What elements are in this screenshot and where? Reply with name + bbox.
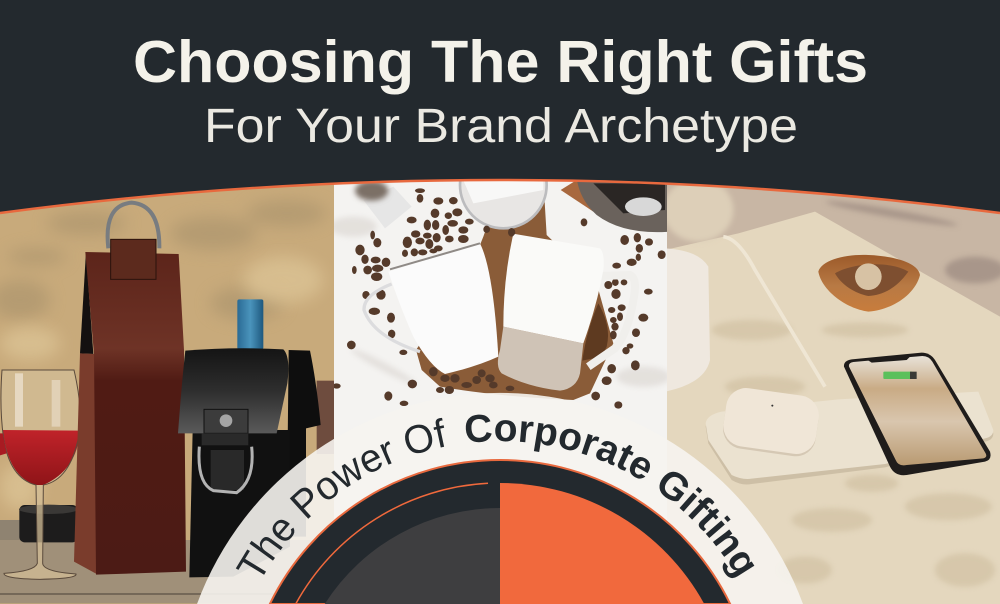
circular badge	[197, 388, 840, 604]
table top	[0, 540, 208, 604]
black leather carrier	[178, 348, 321, 577]
badge heading on arc: Corporate Gifting	[466, 414, 754, 578]
white vase	[665, 248, 710, 392]
panel: leather wine carriers photo	[0, 170, 340, 604]
coffee beans	[333, 188, 666, 409]
glass lid	[458, 181, 548, 230]
ring handle	[108, 203, 159, 248]
marble shading	[330, 217, 670, 387]
black box	[19, 505, 78, 542]
brown leather carrier	[74, 239, 186, 575]
smartphone	[844, 353, 991, 475]
badge dark ring	[270, 460, 730, 604]
earbuds case	[723, 388, 816, 456]
panel: wireless charger photo	[663, 170, 1000, 604]
charging cable	[723, 237, 825, 387]
wood board	[416, 180, 613, 400]
badge heading on arc	[236, 414, 754, 578]
background cloth	[667, 185, 1000, 316]
header banner	[0, 0, 1000, 213]
shell bowl	[818, 255, 920, 312]
panel: coffee mugs photo	[334, 181, 667, 520]
blue bottle top	[237, 299, 263, 349]
pie: orange half	[500, 483, 704, 604]
wall highlight	[0, 257, 323, 510]
mottled wall	[0, 200, 327, 320]
thin orange arc	[296, 483, 488, 604]
charger pad	[706, 392, 993, 484]
subtitle: For Your Brand Archetype	[204, 100, 798, 153]
marble veins	[712, 320, 995, 587]
wine glass	[0, 370, 80, 579]
dried plant	[667, 186, 734, 242]
ground coffee	[582, 303, 608, 361]
glass jar	[363, 187, 412, 228]
badge outer ring	[197, 393, 803, 604]
two-tone mug	[498, 234, 635, 391]
white mug	[364, 243, 498, 374]
title: Choosing The Right Gifts	[133, 29, 868, 95]
pie: dark half	[325, 508, 500, 604]
badge heading on arc: The Power Of	[236, 418, 444, 575]
dark glass coffee jug	[577, 178, 670, 232]
glass jar	[316, 380, 334, 454]
